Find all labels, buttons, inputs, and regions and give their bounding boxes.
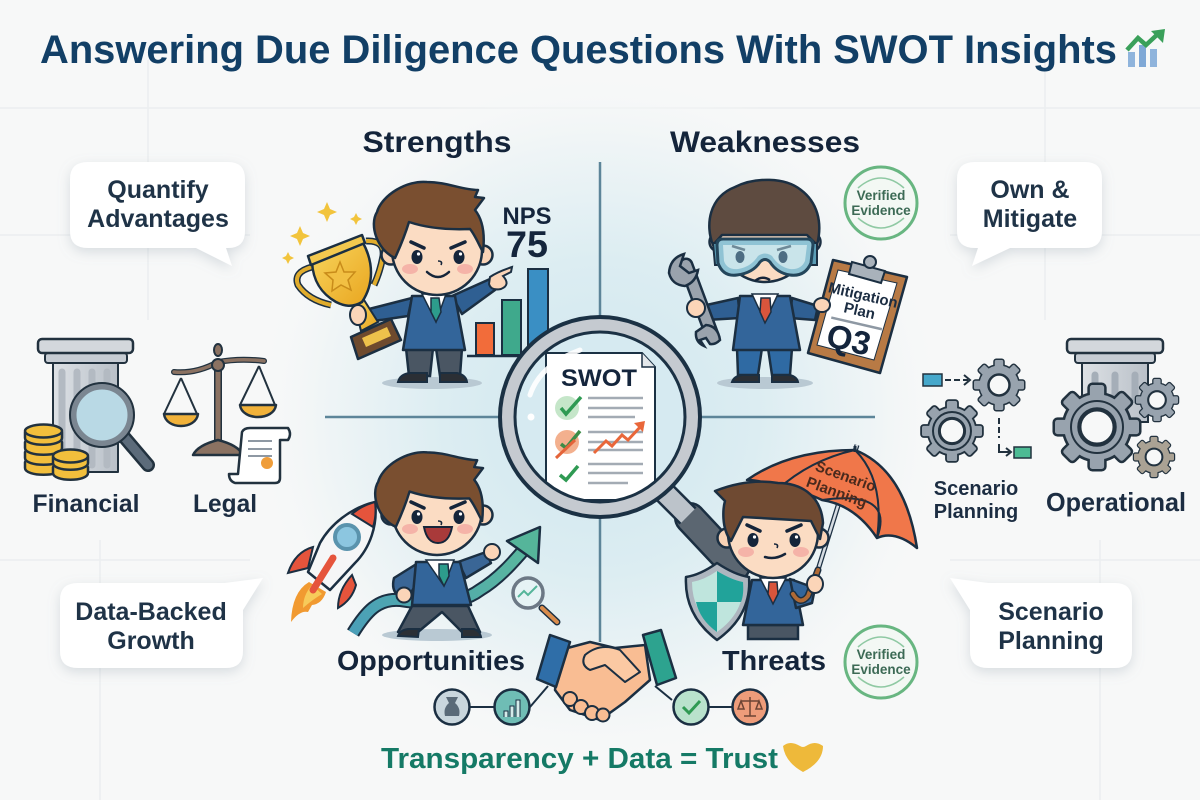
strengths: bar chart with NPS 75: 75	[506, 224, 548, 265]
heading: Opportunities: Opportunities	[337, 645, 525, 676]
icon: legal scales with scroll	[164, 344, 290, 483]
label: Scenario Planning	[934, 478, 1018, 523]
stars	[282, 202, 362, 264]
threats character with umbrella and shield: Planning	[804, 474, 869, 511]
icon: operational pillar with gears	[1055, 339, 1178, 477]
threats character with umbrella and shield	[686, 445, 917, 640]
callout: Quantify Advantages: Advantages	[87, 205, 229, 233]
tagline: Transparency + Data = Trust	[381, 743, 778, 775]
callout: Data-Backed Growth: Data-Backed	[75, 598, 227, 626]
callout: Quantify Advantages	[70, 162, 245, 266]
callout: Data-Backed Growth: Growth	[107, 627, 195, 655]
heading: Strengths: Strengths	[362, 126, 512, 159]
label: Financial: Financial	[32, 490, 140, 518]
central blue glow	[250, 67, 950, 767]
clipboard: Mitigation Plan Q3: Plan	[842, 299, 877, 323]
badge: Verified Evidence top	[845, 167, 917, 239]
opportunities: small magnifier	[513, 578, 557, 622]
opportunities: rocket	[288, 502, 376, 622]
label: Scenario Planning: Planning	[934, 501, 1018, 523]
clipboard: Mitigation Plan Q3: Q3	[823, 317, 874, 363]
strengths: bar chart with NPS 75: NPS	[502, 203, 552, 230]
heading: Weaknesses: Weaknesses	[670, 126, 860, 159]
trust chain nodes	[434, 686, 768, 724]
callout: Own and Mitigate	[957, 162, 1102, 266]
strengths character with trophy	[297, 182, 512, 389]
clipboard: Mitigation Plan Q3	[808, 256, 907, 373]
callout: Quantify Advantages: Quantify	[107, 176, 209, 204]
clipboard: Mitigation Plan Q3: Mitigation	[827, 279, 899, 312]
title: Answering Due Diligence Questions With SWOT Insights	[40, 28, 1117, 72]
quadrant axes	[325, 162, 875, 642]
badge: Verified Evidence bottom: Verified	[857, 647, 905, 662]
central magnifier with SWOT document	[500, 317, 700, 517]
badge: Verified Evidence top: Evidence	[851, 203, 911, 218]
label: Scenario Planning: Scenario	[934, 478, 1018, 500]
handshake	[537, 630, 676, 722]
strengths: bar chart with NPS 75	[467, 203, 552, 356]
heading: Threats: Threats	[722, 645, 826, 676]
callout: Own and Mitigate: Mitigate	[983, 205, 1077, 233]
opportunities character	[375, 452, 500, 641]
label: Legal: Legal	[193, 490, 257, 518]
icon: financial pillar with coins and magnifier	[25, 339, 148, 480]
callout: Scenario Planning: Planning	[998, 627, 1104, 655]
icon: growth chart	[1127, 29, 1165, 67]
SWOT label: SWOT	[561, 365, 637, 392]
label: Operational: Operational	[1046, 487, 1186, 517]
callout: Scenario Planning	[950, 578, 1132, 668]
badge: Verified Evidence bottom: Evidence	[851, 662, 911, 677]
badge: Verified Evidence bottom	[845, 626, 917, 698]
callout: Scenario Planning: Scenario	[998, 598, 1104, 626]
icon: gold handshake	[783, 743, 823, 772]
callout: Data-Backed Growth	[60, 578, 263, 668]
callout: Own and Mitigate: Own &	[990, 176, 1070, 204]
icon: scenario planning gears	[922, 360, 1031, 461]
badge: Verified Evidence top: Verified	[857, 188, 905, 203]
threats character with umbrella and shield: Scenario	[813, 458, 878, 496]
weaknesses character with wrench and clipboard	[669, 180, 820, 389]
magnifier handle	[664, 492, 735, 566]
opportunities: growth arrow	[353, 527, 540, 633]
